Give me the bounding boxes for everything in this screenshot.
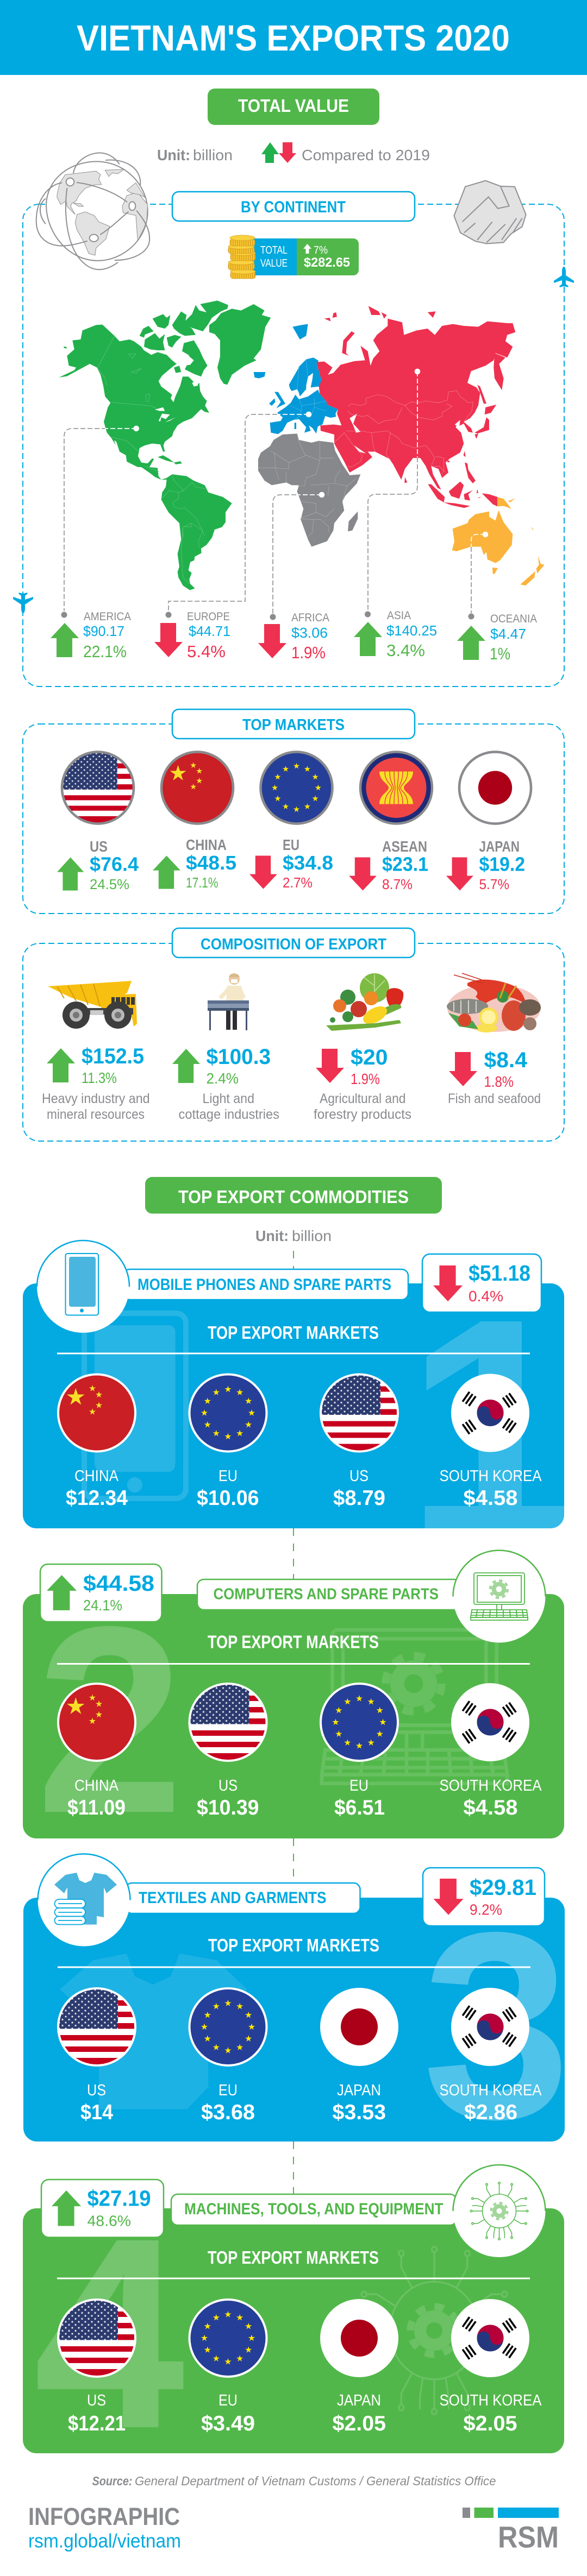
stat: agriculture: $20 [351, 1045, 388, 1069]
market labels: CHINA [74, 1467, 119, 1485]
heading: top export markets: TOP EXPORT MARKETS [208, 1632, 379, 1652]
source note: Source: [92, 2474, 133, 2488]
callout: 27.19 value [41, 2180, 164, 2238]
icon: globe [36, 153, 149, 269]
flag: Japan [320, 1988, 398, 2066]
icon: coin stack [228, 235, 255, 279]
label: computers: COMPUTERS AND SPARE PARTS [213, 1586, 439, 1603]
unit note [255, 1227, 332, 1244]
label: top markets: TOP MARKETS [242, 716, 345, 734]
stat: US market: US [90, 838, 108, 855]
stat: Japan market: $19.2 [479, 853, 525, 876]
flag: South Korea [451, 1988, 529, 2066]
market labels: US [349, 1467, 369, 1485]
market labels: $4.58 [463, 1796, 517, 1819]
market labels: $14 [80, 2101, 113, 2124]
flag: EU [189, 1988, 267, 2066]
flag: Japan [459, 752, 531, 824]
stat: US market [57, 838, 139, 892]
icon: mining truck [48, 981, 137, 1029]
stat: US market: 24.5% [90, 876, 129, 892]
stat: EU market [249, 836, 333, 891]
ghost number 3: 3 [422, 1876, 571, 2174]
icon: phone circle [37, 1240, 129, 1333]
panel: machines [23, 2165, 564, 2485]
market labels: $2.05 [463, 2412, 517, 2435]
stat: EU market: $34.8 [283, 852, 333, 874]
label: top markets [172, 709, 415, 739]
market labels: $2.05 [333, 2412, 386, 2435]
logo: RSM: RSM [498, 2520, 559, 2554]
market labels: JAPAN [337, 2082, 381, 2099]
world map: africa [258, 433, 360, 547]
stat: heavy industry: mineral resources [47, 1107, 145, 1122]
stat: light industry: Light and [202, 1091, 254, 1106]
market labels [68, 2392, 542, 2435]
stat: agriculture [314, 1045, 411, 1122]
icon: vegetables [326, 973, 403, 1031]
market labels: US [87, 2082, 106, 2099]
stat: agriculture: Agricultural and [320, 1091, 405, 1106]
flag: US [58, 2299, 136, 2377]
label: textiles: TEXTILES AND GARMENTS [139, 1889, 326, 1907]
callout: total value 282.65: $282.65 [304, 255, 350, 270]
market labels: $3.53 [333, 2101, 386, 2124]
callout: 29.81 value: 9.2% [470, 1901, 502, 1918]
market labels: $10.06 [197, 1487, 259, 1510]
flag: EU [189, 2299, 267, 2377]
flag: South Korea [451, 2299, 529, 2377]
stat: Japan market: JAPAN [479, 838, 520, 855]
stat: light industry: 2.4% [207, 1070, 239, 1087]
flag: US [189, 1683, 267, 1761]
flag: EU [260, 752, 333, 824]
market labels [80, 2082, 542, 2124]
market labels: $12.34 [66, 1487, 128, 1510]
stat: europe: EUROPE [187, 610, 230, 623]
flag: Japan [320, 2299, 398, 2377]
legend: arrows compared to 2019 [261, 142, 430, 163]
leader lines over land [105, 371, 485, 547]
stat: China market: CHINA [186, 836, 227, 853]
flag: ASEAN [360, 752, 432, 823]
flag: South Korea [451, 1683, 529, 1761]
stat: light industry: cottage industries [178, 1107, 279, 1122]
callout: 29.81 value: $29.81 [470, 1875, 536, 1900]
stat: ASEAN market [349, 838, 428, 892]
stat: heavy industry: 11.3% [82, 1069, 117, 1086]
stat: africa: $3.06 [291, 625, 328, 641]
market labels: SOUTH KOREA [439, 2392, 542, 2409]
label: machines: MACHINES, TOOLS, AND EQUIPMENT [184, 2200, 444, 2218]
stat: europe: $44.71 [189, 623, 230, 639]
label: mobile phones [123, 1269, 408, 1300]
stat: fish and seafood: Fish and seafood [448, 1091, 541, 1106]
stat: ASEAN market: ASEAN [382, 838, 427, 855]
callout: total value 282.65: TOTAL [260, 244, 288, 256]
legend: arrows compared to 2019: Compared to 2019 [302, 147, 430, 163]
heading: top export markets [57, 1322, 530, 1355]
label: textiles [126, 1883, 360, 1913]
market labels: EU [218, 2392, 238, 2409]
market labels: SOUTH KOREA [439, 2082, 542, 2099]
stat: asia: $140.25 [386, 622, 437, 639]
stat: China market: 17.1% [186, 874, 218, 891]
market labels: US [87, 2392, 106, 2409]
market labels: JAPAN [337, 2392, 381, 2409]
ghost number 2: 2 [36, 1571, 184, 1868]
stat: america: AMERICA [84, 610, 131, 623]
flag: US [58, 1988, 136, 2066]
market labels: $3.68 [201, 2101, 255, 2124]
market labels: EU [349, 1777, 369, 1794]
icon: factory worker [208, 973, 249, 1030]
stat: US market: $76.4 [90, 853, 139, 876]
market labels: $2.86 [464, 2101, 517, 2124]
footer: infographic link: INFOGRAPHIC [28, 2503, 180, 2530]
market labels: $6.51 [334, 1796, 385, 1819]
market labels: $10.39 [197, 1796, 259, 1819]
stat: oceania [457, 613, 537, 663]
callout: total value 282.65: 7% [314, 244, 328, 256]
stat: agriculture: forestry products [314, 1107, 411, 1122]
stat: america [51, 610, 131, 661]
market labels: $4.58 [463, 1487, 517, 1510]
label: by continent [172, 192, 415, 221]
market labels: US [218, 1777, 238, 1794]
flag: China [161, 752, 233, 824]
stat: africa: 1.9% [291, 643, 326, 662]
ghost number 4: 4 [34, 2181, 186, 2485]
stat: asia: ASIA [387, 609, 411, 622]
heading: top export markets: TOP EXPORT MARKETS [208, 2247, 379, 2268]
icon: shirt circle [38, 1854, 130, 1947]
market labels: CHINA [74, 1777, 119, 1794]
stat: europe: 5.4% [187, 642, 226, 661]
icon: plane left [13, 593, 33, 613]
stat: america: 22.1% [83, 642, 127, 661]
stat: ASEAN market: $23.1 [382, 853, 428, 876]
heading: top export markets: TOP EXPORT MARKETS [208, 1322, 379, 1343]
stat: africa [258, 612, 329, 662]
unit note: billion [292, 1227, 332, 1244]
stat: heavy industry: $152.5 [82, 1044, 144, 1068]
label: mobile phones: MOBILE PHONES AND SPARE PARTS [138, 1276, 391, 1294]
unit note: Unit: [255, 1227, 289, 1244]
market labels [67, 1777, 542, 1819]
section heading: top export commodities: TOP EXPORT COMMODITIES [178, 1187, 409, 1207]
heading: top export markets [58, 1935, 530, 1968]
section heading: total value [208, 89, 379, 125]
flag: China [58, 1683, 136, 1761]
stat: europe [154, 610, 230, 661]
heading: top export markets: TOP EXPORT MARKETS [208, 1935, 379, 1955]
icon: handshake [454, 181, 526, 244]
callout: total value 282.65: VALUE [260, 257, 288, 269]
callout: 51.18 value: $51.18 [469, 1261, 530, 1286]
footer: infographic link [28, 2503, 181, 2552]
market labels: EU [218, 1467, 238, 1485]
logo: RSM [463, 2508, 559, 2554]
unit note: billion [193, 147, 233, 163]
icon: plane right [554, 267, 574, 287]
stat: america: $90.17 [83, 623, 124, 639]
stat: africa: AFRICA [291, 612, 329, 624]
stat: agriculture: 1.9% [351, 1070, 380, 1087]
market labels: SOUTH KOREA [439, 1467, 542, 1485]
ghost shirt [60, 1954, 247, 2109]
label: composition of export: COMPOSITION OF EXPORT [201, 936, 386, 953]
icon: seafood plate [447, 973, 541, 1032]
flag: China [58, 1374, 136, 1452]
stat: Japan market [446, 838, 525, 892]
flag: EU [189, 1374, 267, 1452]
icon: circuit circle [453, 2165, 546, 2257]
world map: america [59, 300, 271, 590]
panel: composition of export [23, 928, 564, 1141]
callout: total value 282.65 [228, 235, 359, 279]
label: composition of export [172, 928, 415, 958]
section heading: top export commodities [145, 1177, 442, 1213]
panel: top markets [23, 709, 564, 914]
connector line [293, 1251, 294, 2195]
map pins [133, 369, 488, 537]
ghost artwork [84, 1313, 186, 1498]
heading: top export markets [57, 1632, 530, 1665]
panel: textiles [23, 1853, 565, 2142]
callout: 29.81 value [423, 1868, 545, 1926]
icon: computer circle [453, 1550, 546, 1642]
callout: 27.19 value: $27.19 [87, 2185, 151, 2210]
ghost computer [322, 1630, 507, 1784]
unit note [157, 147, 233, 163]
label: machines [171, 2194, 457, 2225]
stat: fish and seafood: 1.8% [484, 1073, 514, 1090]
market labels: $11.09 [67, 1796, 126, 1819]
stat: ASEAN market: 8.7% [382, 876, 413, 892]
market labels: $8.79 [333, 1487, 385, 1510]
market labels: $3.49 [201, 2412, 255, 2435]
ghost number 1: 1 [405, 1253, 580, 1605]
market labels: EU [218, 2082, 238, 2099]
stat: oceania: $4.47 [490, 626, 526, 642]
stat: fish and seafood: $8.4 [484, 1048, 528, 1072]
market labels: SOUTH KOREA [439, 1777, 542, 1794]
stat: China market: $48.5 [186, 852, 236, 874]
section heading: total value: TOTAL VALUE [238, 96, 349, 116]
flag: South Korea [451, 1374, 529, 1452]
source note: General Department of Vietnam Customs / General Statistics Office [135, 2474, 496, 2488]
callout: 27.19 value: 48.6% [87, 2213, 131, 2229]
stat: light industry [172, 1045, 279, 1122]
world map: oceania [444, 482, 545, 585]
title: VIETNAM'S EXPORTS 2020 [77, 18, 510, 59]
world map: asia [317, 306, 515, 508]
stat: asia [354, 609, 437, 660]
stat: light industry: $100.3 [207, 1045, 271, 1069]
leader lines [64, 414, 471, 614]
label: by continent: BY CONTINENT [241, 198, 346, 216]
stat: asia: 3.4% [386, 641, 425, 660]
flag: EU [320, 1683, 398, 1761]
unit note: Unit: [157, 147, 190, 163]
panel: by continent [23, 204, 564, 686]
callout: 51.18 value [422, 1254, 541, 1312]
stat: EU market: 2.7% [283, 874, 313, 891]
flag: US [320, 1374, 398, 1452]
flag: US [62, 752, 134, 824]
stat: Japan market: 5.7% [479, 876, 509, 892]
world map: europe [254, 324, 338, 434]
market labels: $12.21 [68, 2412, 126, 2435]
stat: heavy industry [42, 1044, 150, 1122]
panel: computers [23, 1550, 564, 1868]
heading: top export markets [57, 2247, 530, 2279]
callout: 44.58 value: $44.58 [83, 1571, 154, 1596]
label: computers [197, 1579, 460, 1610]
market labels [66, 1467, 542, 1510]
stat: oceania: OCEANIA [490, 613, 537, 625]
stat: oceania: 1% [490, 644, 510, 663]
stat: EU market: EU [283, 836, 299, 853]
header banner [0, 0, 587, 75]
panel: mobile phones [23, 1239, 564, 1528]
callout: 44.58 value [40, 1564, 162, 1622]
footer: infographic link: rsm.global/vietnam [28, 2530, 181, 2552]
stat: heavy industry: Heavy industry and [42, 1091, 150, 1106]
stat: fish and seafood [448, 1048, 541, 1106]
ghost circuit [358, 2247, 511, 2414]
callout: 51.18 value: 0.4% [469, 1288, 503, 1305]
stat: China market [153, 836, 236, 891]
callout: 44.58 value: 24.1% [83, 1597, 122, 1614]
